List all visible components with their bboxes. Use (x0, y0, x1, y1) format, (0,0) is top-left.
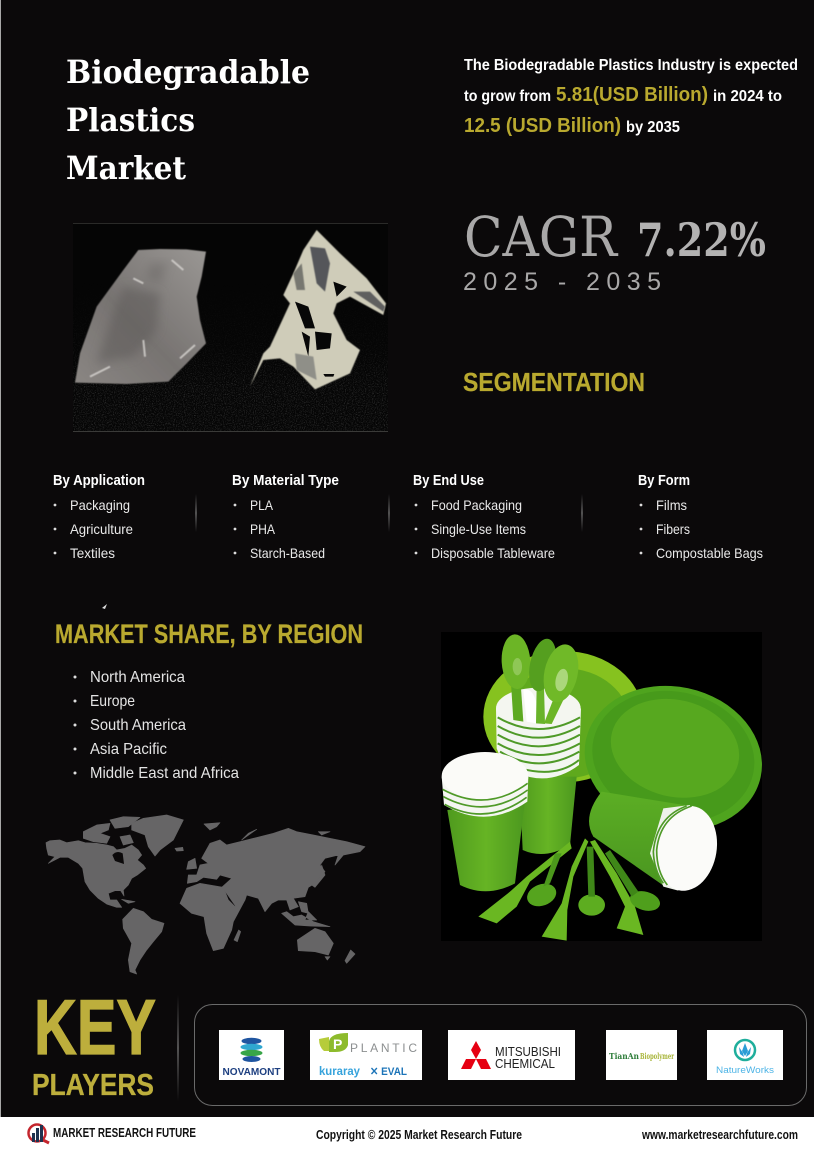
segment: by application: Agriculture (70, 521, 133, 537)
market forecast text: to grow from (464, 88, 551, 105)
heading: market share by region: MARKET SHARE, BY REGION (55, 619, 363, 649)
lying cup (589, 792, 723, 895)
brand name: MARKET RESEARCH FUTURE (53, 1126, 196, 1140)
key players heading: KEY (34, 983, 156, 1071)
region list: South America (90, 717, 186, 734)
logo: Mitsubishi Chemical: MITSUBISHI (495, 1044, 561, 1059)
segment: by end use: By End Use (413, 472, 484, 489)
stack cup body (519, 777, 577, 854)
key players heading (32, 983, 156, 1102)
logo: Plantic Kuraray EVAL: ✕ EVAL (370, 1066, 407, 1078)
CAGR figure (463, 205, 766, 296)
segment: by form (638, 472, 763, 561)
icon: market research future logo (28, 1124, 49, 1143)
segment: by end use: Disposable Tableware (431, 545, 555, 561)
segment: by material type: PLA (250, 497, 274, 513)
left cup (442, 752, 528, 891)
region list: Asia Pacific (90, 741, 167, 758)
logo: TianAn Biopolymer (606, 1030, 677, 1080)
logo: Novamont: NOVAMONT (222, 1067, 280, 1078)
copyright: Copyright © 2025 Market Research Future (316, 1128, 522, 1142)
title: Biodegradable (66, 53, 310, 91)
spoons (500, 634, 583, 724)
heading: segmentation: SEGMENTATION (463, 367, 645, 397)
logo: Mitsubishi Chemical: CHEMICAL (495, 1056, 555, 1071)
logo: Plantic Kuraray EVAL: P (333, 1036, 342, 1052)
logo: Plantic Kuraray EVAL: kuraray (319, 1064, 360, 1078)
world map (46, 815, 365, 974)
CAGR figure: 7.22% (637, 213, 766, 267)
segment: by material type: By Material Type (232, 472, 339, 489)
market forecast text: by 2035 (626, 119, 680, 136)
logo: TianAn Biopolymer: TianAn (609, 1051, 639, 1061)
segment: by end use (413, 472, 555, 561)
right degraded plastic sheet (250, 230, 386, 389)
segment: by form: By Form (638, 472, 690, 489)
logo: NatureWorks (707, 1030, 783, 1080)
segment: by form: Fibers (656, 521, 690, 537)
segment: by form: Films (656, 497, 687, 513)
title: Plastics (66, 101, 195, 139)
segment: by material type (232, 472, 339, 561)
market forecast text: in 2024 to (713, 88, 782, 105)
photo: biodegradable plastic samples (73, 223, 388, 432)
segment: by material type: PHA (250, 521, 276, 537)
logo: Plantic Kuraray EVAL: PLANTIC (350, 1041, 417, 1055)
logo: TianAn Biopolymer: Biopolymer (640, 1051, 675, 1061)
segment: by end use: Single-Use Items (431, 521, 526, 537)
segment: by application: Textiles (70, 545, 115, 561)
segment: by end use: Food Packaging (431, 497, 522, 513)
title: Market (66, 149, 186, 187)
CAGR figure: 2025 - 2035 (463, 268, 661, 296)
logo: Novamont (219, 1030, 284, 1080)
segment: by application: By Application (53, 472, 145, 489)
segment: by application: Packaging (70, 497, 130, 513)
market forecast text: 5.81(USD Billion) (556, 84, 708, 106)
market forecast text (464, 57, 798, 137)
region list: Middle East and Africa (90, 765, 239, 782)
front plate (571, 670, 776, 847)
logo: Plantic Kuraray EVAL (310, 1030, 422, 1080)
market forecast text: 12.5 (USD Billion) (464, 115, 621, 137)
cutlery fan (478, 838, 662, 941)
segment: by application (53, 472, 145, 561)
region list: North America (90, 669, 185, 686)
logo: NatureWorks: NatureWorks (716, 1065, 774, 1076)
key players panel (194, 1004, 806, 1106)
photo: green biodegradable tableware (441, 632, 776, 941)
CAGR figure: CAGR (464, 205, 618, 269)
logo: Mitsubishi Chemical (448, 1030, 575, 1080)
footer (0, 1117, 814, 1150)
region list (74, 669, 239, 782)
left clear plastic sheet (75, 249, 206, 384)
key players heading: PLAYERS (32, 1067, 154, 1102)
back plate (483, 651, 643, 782)
region list: Europe (90, 693, 135, 710)
stacked cups rim (496, 688, 581, 778)
segment: by material type: Starch-Based (250, 545, 325, 561)
title (66, 53, 310, 187)
segment: by form: Compostable Bags (656, 545, 763, 561)
